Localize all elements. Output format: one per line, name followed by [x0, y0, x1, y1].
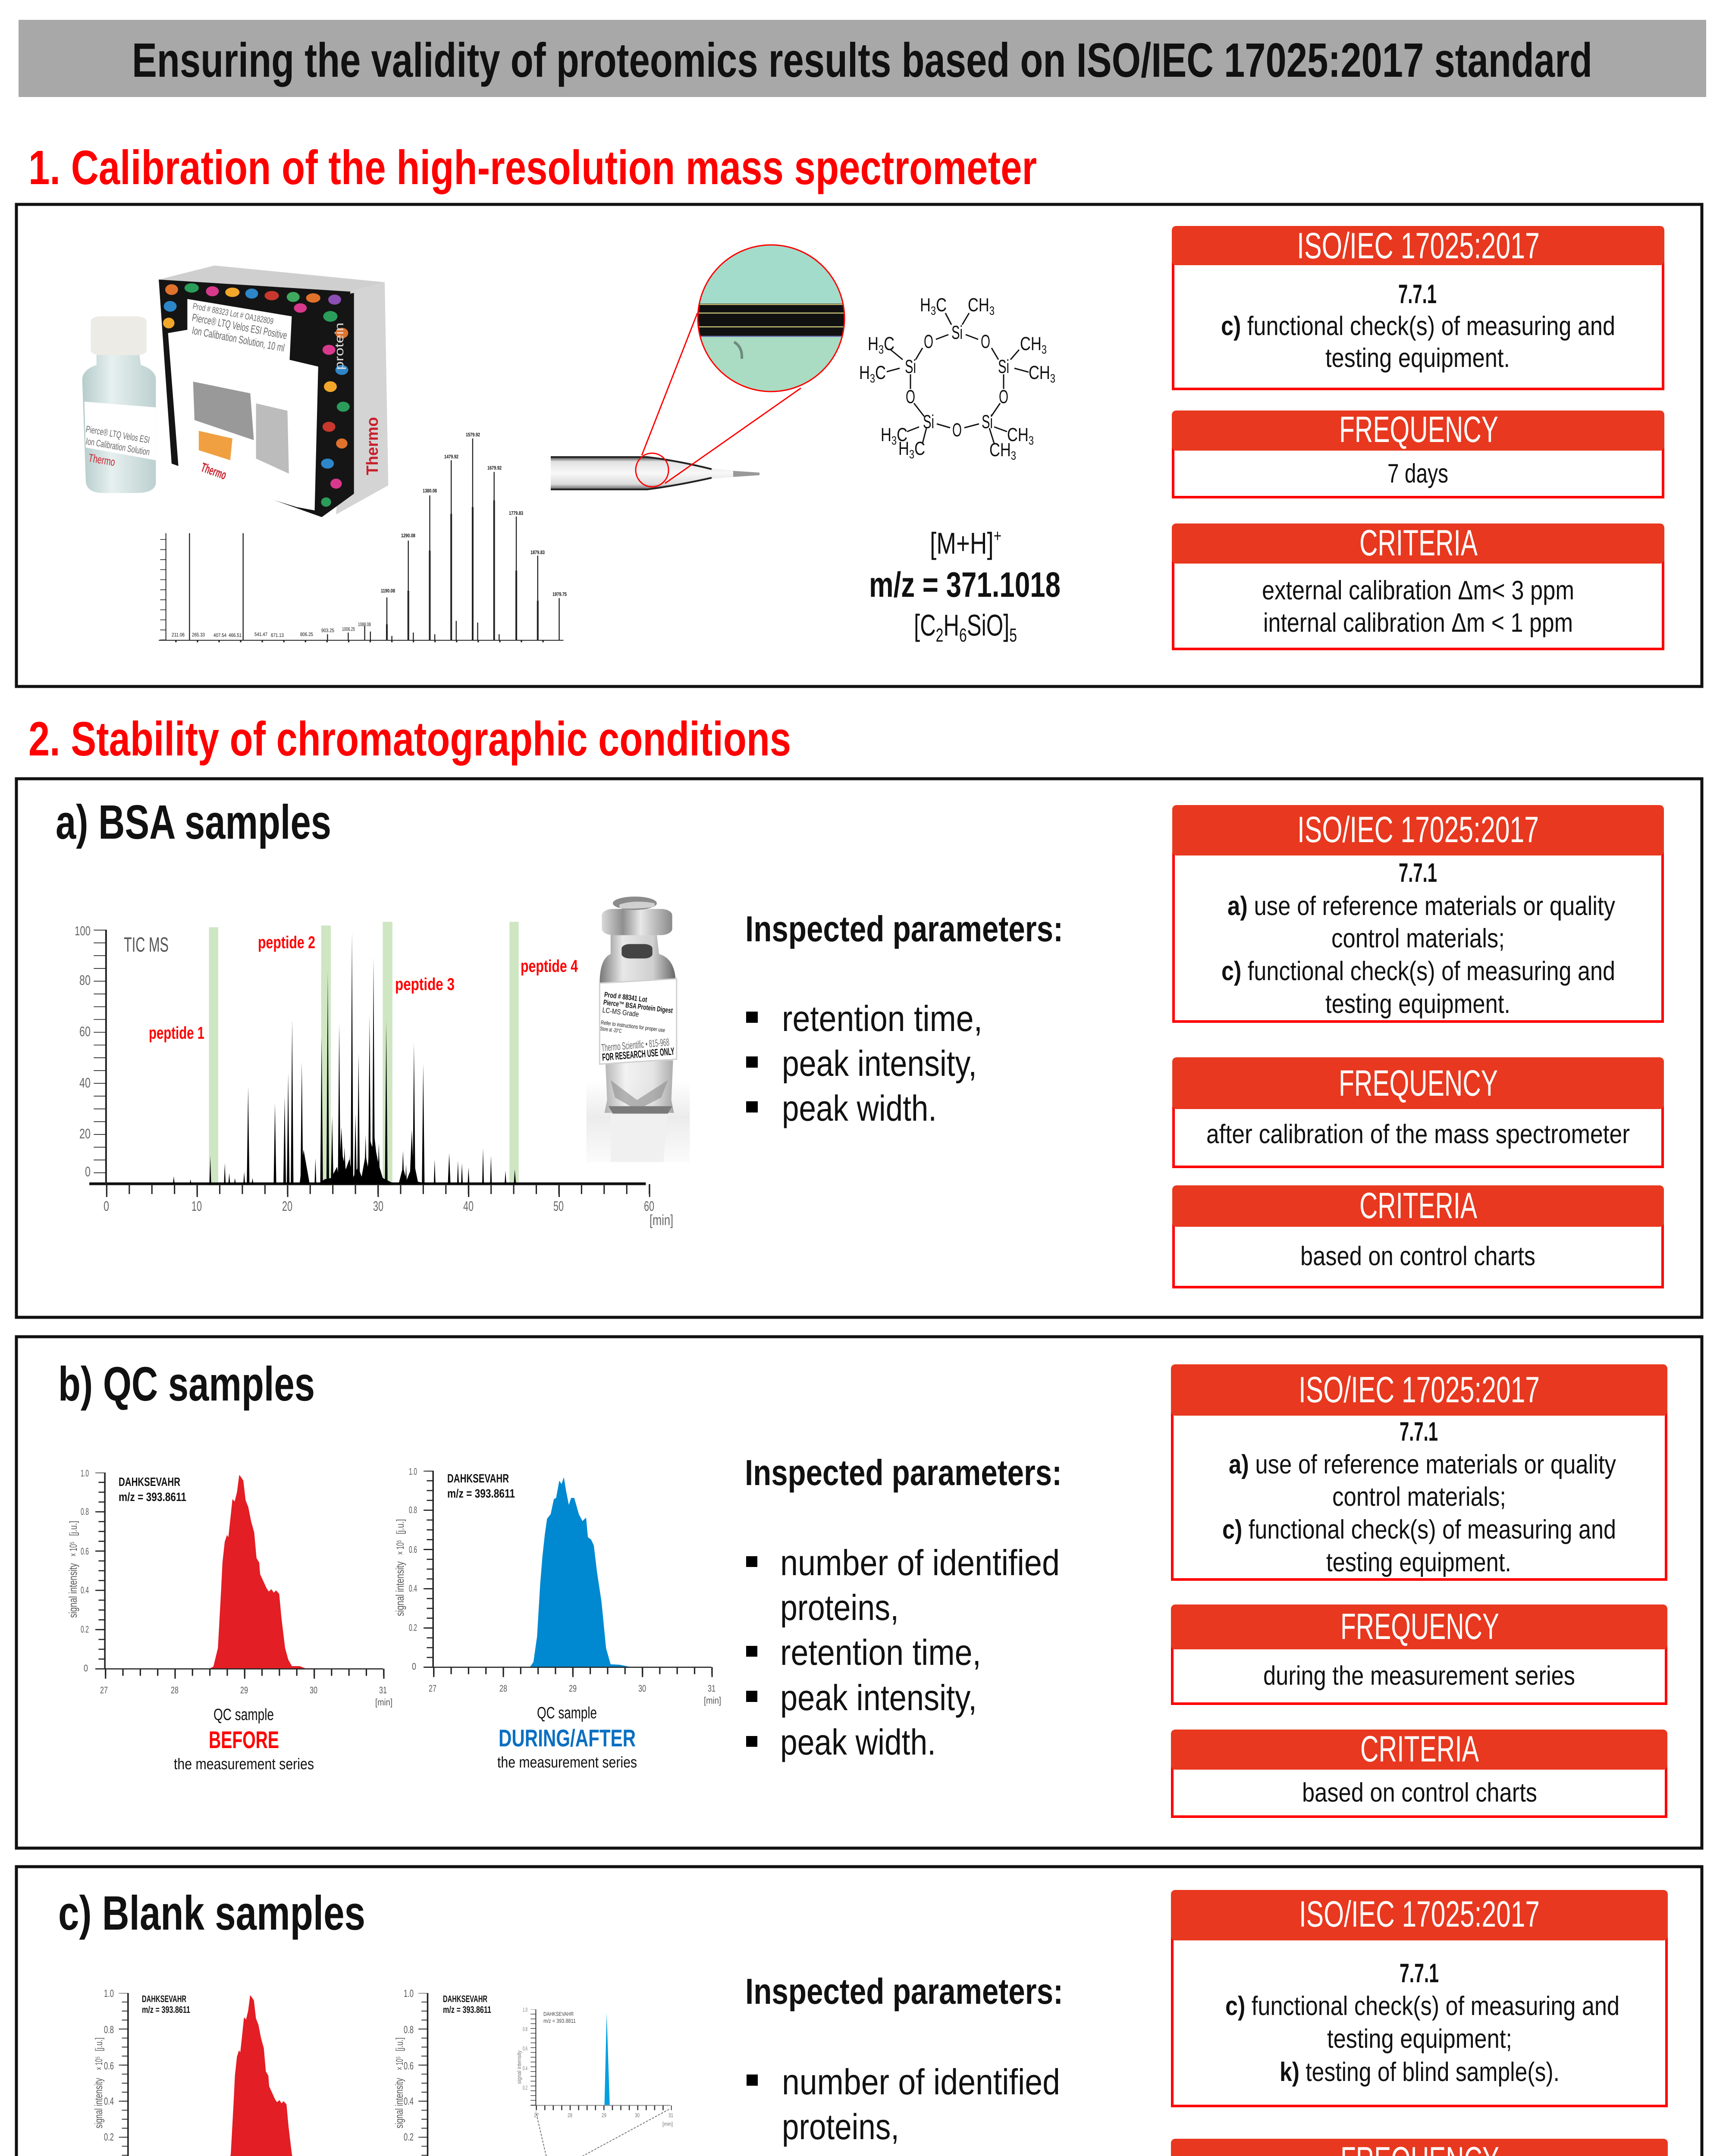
chart: TIC chromatogram: 60	[79, 1024, 91, 1039]
photo: calibration solution box and vial: protein	[333, 323, 346, 370]
inset labels: 0.2	[523, 2084, 527, 2091]
box: frequency	[1171, 2139, 1668, 2156]
diagram: cyclic siloxane molecule: 3	[931, 304, 936, 317]
chart: calibration mass spectrum: 903.25	[321, 627, 334, 633]
caption: QC before	[174, 1706, 314, 1773]
photo: calibration solution box and vial: Ion Calibration Solution	[85, 436, 151, 458]
box: ISO standard clause: c) functional check(s) of measuring and	[1225, 1991, 1619, 2021]
text: molecular ion values: H	[943, 608, 959, 642]
box: ISO standard clause: ISO/IEC 17025:2017	[1297, 226, 1540, 266]
box: frequency: 7 days	[1387, 459, 1448, 489]
list: inspected parameters QC: peak intensity,	[780, 1677, 977, 1718]
chart: blank peak before: 0.2	[104, 2131, 114, 2143]
diagram: cyclic siloxane molecule: H	[859, 362, 873, 383]
chart: QC peak before: 0.2	[81, 1624, 89, 1635]
chart: calibration mass spectrum: 1190.08	[381, 588, 395, 594]
inset labels: 28	[568, 2112, 572, 2118]
text: molecular ion values: 5	[1009, 625, 1017, 646]
diagram: cyclic siloxane molecule	[859, 295, 1055, 462]
chart: TIC chromatogram: Refer to instructions for proper use	[600, 1019, 665, 1034]
diagram: cyclic siloxane molecule: C	[936, 295, 947, 316]
chart: TIC chromatogram	[75, 896, 690, 1228]
caption: QC during/after	[497, 1704, 637, 1771]
chart: QC peak during/after: 28	[499, 1683, 507, 1694]
box: ISO standard clause: a) use of reference materials or quality	[1229, 1450, 1616, 1479]
chart: blank peak before: 0.4	[104, 2096, 114, 2107]
chart: blank peak before	[93, 1988, 390, 2156]
diagram: cyclic siloxane molecule: O	[981, 331, 990, 352]
chart: QC peak before: 27	[100, 1685, 108, 1695]
box: ISO standard clause: 7.7.1	[1398, 279, 1437, 309]
chart: QC peak during/after: [min]	[704, 1695, 721, 1706]
text: molecular ion values	[869, 526, 1061, 646]
diagram: cyclic siloxane molecule: C	[884, 333, 894, 354]
chart: blank during/after with inset: × 10⁵	[394, 2056, 405, 2070]
diagram: cyclic siloxane molecule: CH	[968, 295, 995, 316]
list: inspected parameters QC	[745, 1452, 1062, 1762]
box: frequency: FREQUENCY	[1339, 409, 1498, 450]
box: ISO standard clause: control materials;	[1332, 1482, 1506, 1512]
box: ISO standard clause	[1171, 1890, 1668, 2106]
chart: QC peak before: 30	[310, 1685, 317, 1695]
chart: calibration mass spectrum: 1979.75	[552, 591, 567, 597]
list: inspected parameters blank: number of identified	[782, 2062, 1060, 2102]
diagram: cyclic siloxane molecule: 3	[1050, 372, 1055, 385]
caption: QC during/after: the measurement series	[497, 1753, 637, 1771]
chart: blank during/after with inset: DAHKSEVAHR	[443, 1993, 487, 2004]
list: inspected parameters BSA: retention time,	[782, 998, 982, 1039]
chart: QC peak during/after: 1.0	[409, 1466, 417, 1477]
chart: QC peak during/after: 0.2	[409, 1622, 417, 1633]
chart: TIC chromatogram: 30	[373, 1198, 383, 1214]
chart: QC peak during/after: signal intensity	[393, 1561, 406, 1616]
inset labels: 30	[635, 2112, 640, 2118]
diagram: cyclic siloxane molecule: 3	[1042, 343, 1047, 356]
diagram: cyclic siloxane molecule: O	[906, 386, 915, 407]
chart: TIC chromatogram: TIC MS	[124, 934, 169, 956]
panel: Blank samples	[16, 1867, 1702, 2156]
chart: blank peak before: signal intensity	[93, 2078, 105, 2128]
inset labels	[516, 2006, 673, 2127]
panel: QC samples	[16, 1337, 1702, 1848]
box: ISO standard clause: testing equipment.	[1325, 343, 1510, 373]
chart: TIC chromatogram: 20	[282, 1198, 292, 1214]
subheading: Blank samples: c) Blank samples	[58, 1886, 365, 1940]
chart: QC peak before: 1.0	[81, 1468, 89, 1479]
box: ISO standard clause: 7.7.1	[1400, 1959, 1439, 1988]
list: inspected parameters blank: proteins,	[782, 2106, 899, 2147]
chart: TIC chromatogram: 0	[85, 1164, 91, 1179]
box: frequency	[1171, 1604, 1667, 1704]
photo: calibration solution box and vial: Ion Calibration Solution, 10 ml	[191, 324, 286, 354]
diagram: cyclic siloxane molecule: H	[868, 333, 882, 354]
chart: QC peak during/after: DAHKSEVAHR	[447, 1472, 509, 1485]
chart: TIC chromatogram: Thermo Scientific • 815-968	[601, 1037, 670, 1054]
chart: QC peak before: 0.4	[81, 1585, 89, 1595]
heading: section 1: 1. Calibration of the high-resolution mass spectrometer	[28, 141, 1037, 194]
box: criteria	[1172, 523, 1664, 649]
inset labels: 1.0	[523, 2006, 527, 2013]
chart: QC peak during/after: m/z = 393.8611	[447, 1487, 515, 1500]
chart: calibration mass spectrum: 541.47	[254, 631, 267, 637]
diagram: cyclic siloxane molecule: CH	[989, 439, 1017, 461]
box: criteria: based on control charts	[1300, 1241, 1535, 1271]
chart: QC peak during/after: 29	[569, 1683, 577, 1694]
diagram: cyclic siloxane molecule: 3	[891, 434, 897, 447]
inset labels: [min]	[662, 2121, 673, 2127]
chart: TIC chromatogram: peptide 4	[521, 957, 578, 976]
chart: QC peak before: DAHKSEVAHR	[119, 1475, 180, 1489]
chart: TIC chromatogram: 100	[75, 924, 91, 938]
chart: calibration mass spectrum: 211.06	[172, 632, 185, 638]
inset labels: 31	[668, 2112, 673, 2118]
list: inspected parameters blank	[745, 1971, 1063, 2156]
diagram: cyclic siloxane molecule: Si	[998, 356, 1009, 377]
box: criteria	[1171, 1729, 1667, 1817]
diagram: cyclic siloxane molecule: Si	[923, 411, 934, 432]
chart: QC peak during/after: × 10⁵	[395, 1540, 406, 1555]
caption: QC before: the measurement series	[174, 1755, 314, 1773]
chart: blank during/after with inset	[393, 1988, 690, 2156]
box: frequency: during the measurement series	[1263, 1661, 1575, 1691]
list: inspected parameters blank: Inspected parameters:	[745, 1971, 1063, 2012]
inset labels: 0.8	[523, 2026, 527, 2032]
chart: QC peak before: [j.u.]	[68, 1521, 79, 1536]
diagram: cyclic siloxane molecule: 3	[909, 448, 914, 461]
list: inspected parameters BSA: Inspected parameters:	[745, 909, 1063, 949]
text: molecular ion values: m/z = 371.1018	[869, 565, 1061, 605]
chart: blank peak before: DAHKSEVAHR	[142, 1993, 186, 2004]
box: ISO standard clause: control materials;	[1331, 924, 1505, 953]
chart: blank peak before: [j.u.]	[93, 2037, 104, 2051]
list: inspected parameters QC: Inspected parameters:	[745, 1452, 1062, 1493]
box: criteria	[1172, 1185, 1664, 1287]
inset labels: 0.6	[523, 2045, 527, 2052]
chart: TIC chromatogram: [min]	[650, 1212, 673, 1228]
chart: blank during/after with inset: 0.8	[404, 2024, 414, 2036]
caption: QC during/after: QC sample	[537, 1704, 597, 1722]
inset labels: signal intensity	[516, 2050, 522, 2084]
chart: calibration mass spectrum: 1679.92	[487, 465, 502, 471]
box: ISO standard clause: k) testing of blind sample(s).	[1280, 2057, 1560, 2087]
photo: calibration solution box and vial: Prod # 88323 Lot # OA182809	[192, 301, 274, 326]
text: molecular ion values: [C	[914, 608, 944, 642]
box: ISO standard clause: 7.7.1	[1399, 858, 1437, 888]
chart: blank peak before: × 10⁵	[93, 2056, 104, 2070]
box: ISO standard clause: ISO/IEC 17025:2017	[1299, 1369, 1540, 1410]
diagram: cyclic siloxane molecule: H	[881, 424, 894, 445]
chart: QC peak during/after	[393, 1466, 721, 1771]
diagram: cyclic siloxane molecule: O	[924, 331, 933, 352]
diagram: cyclic siloxane molecule: 3	[879, 343, 884, 356]
chart: calibration mass spectrum: 806.25	[300, 631, 313, 637]
text: molecular ion values: SiO]	[967, 608, 1009, 642]
chart: TIC chromatogram: 0	[104, 1198, 109, 1214]
chart: blank peak before: 0.6	[104, 2060, 114, 2072]
chart: QC peak before: 0.8	[81, 1506, 89, 1517]
diagram: cyclic siloxane molecule: H	[898, 438, 912, 459]
chart: QC peak during/after: 0.4	[409, 1583, 417, 1594]
text: molecular ion values: 2	[936, 625, 943, 646]
chart: QC peak during/after: 0.6	[409, 1544, 417, 1555]
diagram: cyclic siloxane molecule: C	[914, 438, 925, 459]
chart: calibration mass spectrum: 407.54	[213, 632, 226, 638]
chart: QC peak during/after: 0.8	[409, 1504, 417, 1515]
chart: TIC chromatogram: Prod # 88341 Lot	[604, 990, 648, 1004]
text: molecular ion values: +	[994, 526, 1001, 545]
list: inspected parameters BSA	[745, 909, 1063, 1128]
box: ISO standard clause: c) functional check(s) of measuring and	[1221, 956, 1615, 986]
text: molecular ion values: 6	[959, 625, 967, 646]
chart: TIC chromatogram: 50	[553, 1198, 564, 1214]
chart: calibration mass spectrum: 1088.08	[358, 621, 371, 627]
chart: TIC chromatogram: 40	[79, 1075, 91, 1091]
chart: TIC chromatogram: Store at -20°C	[600, 1025, 622, 1034]
diagram: cyclic siloxane molecule: O	[952, 420, 962, 441]
diagram: cyclic siloxane molecule: C	[875, 362, 886, 383]
chart: QC peak before	[66, 1468, 392, 1773]
chart: TIC chromatogram: 20	[79, 1126, 91, 1141]
subheading: BSA samples: a) BSA samples	[56, 795, 331, 849]
diagram: cyclic siloxane molecule: CH	[1020, 333, 1048, 354]
list: inspected parameters QC: retention time,	[780, 1632, 981, 1673]
panel: BSA samples	[16, 779, 1702, 1317]
chart: blank during/after with inset: 0.6	[404, 2060, 414, 2072]
box: ISO standard clause: ISO/IEC 17025:2017	[1297, 809, 1539, 850]
diagram: cyclic siloxane molecule: 3	[1011, 449, 1016, 462]
inset labels: 27	[534, 2112, 539, 2118]
chart: QC peak before: signal intensity	[66, 1563, 79, 1618]
chart: TIC chromatogram: peptide 2	[258, 933, 315, 952]
chart: blank during/after with inset: signal intensity	[393, 2078, 405, 2128]
chart: TIC chromatogram: LC-MS Grade	[602, 1006, 639, 1018]
chart: QC peak before: × 10⁵	[68, 1542, 79, 1557]
box: criteria: CRITERIA	[1359, 1185, 1477, 1226]
chart: blank during/after with inset: 1.0	[404, 1988, 414, 1999]
box: frequency: after calibration of the mass spectrometer	[1206, 1119, 1630, 1149]
diagram: cyclic siloxane molecule: Si	[982, 411, 993, 432]
chart: blank peak before: 1.0	[104, 1988, 114, 1999]
chart: QC peak before: 29	[240, 1685, 248, 1695]
box: criteria: external calibration Δm< 3 ppm	[1262, 576, 1574, 605]
chart: QC peak during/after: 0	[412, 1661, 416, 1672]
icon: ESI needle tip with magnified view	[551, 245, 844, 490]
diagram: cyclic siloxane molecule: 3	[870, 372, 875, 385]
box: ISO standard clause	[1172, 226, 1664, 389]
box: frequency: FREQUENCY	[1339, 1063, 1498, 1104]
chart: TIC chromatogram: FOR RESEARCH USE ONLY	[602, 1046, 675, 1063]
chart: calibration mass spectrum: 1579.92	[466, 432, 480, 438]
chart: calibration mass spectrum: 1380.08	[423, 488, 437, 494]
chart: blank during/after with inset: 0.4	[404, 2096, 414, 2107]
photo: calibration solution box and vial: Thermo	[199, 461, 228, 483]
box: ISO standard clause: testing equipment;	[1327, 2024, 1512, 2054]
diagram: cyclic siloxane molecule: C	[897, 424, 907, 445]
chart: blank peak before: 0.8	[104, 2024, 114, 2036]
chart: QC peak before: [min]	[375, 1697, 392, 1708]
box: ISO standard clause: 7.7.1	[1400, 1417, 1438, 1447]
chart: TIC chromatogram: peptide 1	[149, 1024, 204, 1043]
diagram: cyclic siloxane molecule: CH	[1029, 362, 1056, 383]
box: ISO standard clause	[1171, 1364, 1667, 1579]
box: criteria: CRITERIA	[1359, 523, 1478, 564]
list: inspected parameters QC: proteins,	[780, 1587, 899, 1628]
box: ISO standard clause: c) functional check(s) of measuring and	[1221, 311, 1615, 341]
box: frequency	[1172, 409, 1664, 497]
chart: QC peak during/after: [j.u.]	[395, 1519, 406, 1534]
photo: calibration solution box and vial	[82, 266, 388, 517]
photo: calibration solution box and vial: Thermo	[88, 451, 116, 469]
inset labels: m/z = 393.8811	[543, 2018, 576, 2024]
list: inspected parameters QC: number of identified	[780, 1542, 1060, 1583]
box: ISO standard clause: c) functional check(s) of measuring and	[1222, 1515, 1616, 1545]
diagram: cyclic siloxane molecule: CH	[1007, 424, 1035, 445]
chart: calibration mass spectrum: 671.13	[271, 632, 284, 638]
chart: TIC chromatogram: Pierce™ BSA Protein Digest	[603, 998, 673, 1015]
caption: QC during/after: DURING/AFTER	[499, 1724, 636, 1752]
panel: calibration	[16, 204, 1702, 686]
box: criteria: based on control charts	[1302, 1778, 1537, 1808]
diagram: cyclic siloxane molecule: O	[999, 386, 1008, 407]
diagram: cyclic siloxane molecule: 3	[989, 304, 995, 317]
diagram: cyclic siloxane molecule: Si	[951, 322, 963, 343]
list: inspected parameters BSA: peak width.	[782, 1088, 937, 1128]
chart: calibration mass spectrum: 466.51	[229, 632, 242, 638]
text: molecular ion values: [M+H]	[930, 526, 1011, 560]
chart: blank during/after with inset: [j.u.]	[394, 2037, 405, 2051]
caption: QC before: BEFORE	[209, 1726, 279, 1753]
chart: TIC chromatogram: 40	[463, 1198, 474, 1214]
diagram: cyclic siloxane molecule: H	[920, 295, 934, 316]
box: frequency: FREQUENCY	[1340, 1606, 1499, 1647]
list: inspected parameters BSA: peak intensity,	[782, 1043, 977, 1084]
chart: calibration mass spectrum	[159, 432, 567, 641]
box: ISO standard clause: testing equipment.	[1326, 1548, 1511, 1577]
chart: calibration mass spectrum: 1879.83	[530, 549, 545, 555]
chart: blank during/after with inset: 0.2	[404, 2131, 414, 2143]
subheading: QC samples: b) QC samples	[58, 1357, 315, 1411]
chart: QC peak before: 28	[171, 1685, 179, 1695]
photo: calibration solution box and vial: Pierce® LTQ Velos ESI	[85, 423, 151, 445]
photo: calibration solution box and vial: Pierce® LTQ Velos ESI Positive	[191, 311, 288, 342]
chart: QC peak during/after: 31	[708, 1683, 716, 1694]
chart: calibration mass spectrum: 1006.25	[342, 626, 355, 632]
box: ISO standard clause: testing equipment.	[1325, 989, 1510, 1019]
chart: blank during/after with inset: m/z = 393.8611	[443, 2004, 491, 2015]
box: criteria: internal calibration Δm < 1 ppm	[1263, 608, 1573, 638]
title banner	[19, 20, 1706, 97]
diagram: cyclic siloxane molecule: 3	[1029, 434, 1034, 447]
diagram: cyclic siloxane molecule: Si	[905, 356, 916, 377]
chart: TIC chromatogram: 10	[191, 1198, 202, 1214]
chart: QC peak before: m/z = 393.8611	[119, 1490, 186, 1504]
chart: calibration mass spectrum: 265.33	[192, 632, 205, 638]
chart: QC peak before: 31	[379, 1685, 387, 1695]
chart: TIC chromatogram: peptide 3	[395, 975, 455, 994]
chart: QC peak during/after: 30	[638, 1683, 646, 1694]
box: ISO standard clause: ISO/IEC 17025:2017	[1299, 1894, 1540, 1935]
chart: calibration mass spectrum: 1779.83	[509, 510, 523, 516]
inset labels: 0.4	[523, 2065, 527, 2071]
list: inspected parameters QC: peak width.	[780, 1722, 936, 1762]
chart: TIC chromatogram: 80	[79, 972, 91, 988]
box: criteria: CRITERIA	[1360, 1729, 1479, 1770]
photo: calibration solution box and vial: Thermo	[364, 417, 382, 475]
caption: QC before: QC sample	[213, 1706, 274, 1724]
chart: calibration mass spectrum: 1479.92	[444, 454, 458, 460]
chart: TIC chromatogram: 60	[644, 1198, 654, 1214]
chart: calibration mass spectrum: 1290.08	[401, 533, 415, 539]
inset labels: DAHKSEVAHR	[543, 2011, 574, 2017]
box: ISO standard clause: a) use of reference materials or quality	[1227, 891, 1615, 921]
box: frequency	[1172, 1057, 1664, 1167]
chart: QC peak before: 0	[84, 1663, 88, 1673]
box: ISO standard clause	[1172, 805, 1664, 1022]
chart: QC peak during/after: 27	[429, 1683, 436, 1694]
inset labels: 29	[602, 2112, 606, 2118]
chart: blank peak before: m/z = 393.8611	[142, 2004, 190, 2015]
heading: section 2: 2. Stability of chromatographic conditions	[28, 712, 791, 766]
chart: QC peak before: 0.6	[81, 1546, 89, 1557]
